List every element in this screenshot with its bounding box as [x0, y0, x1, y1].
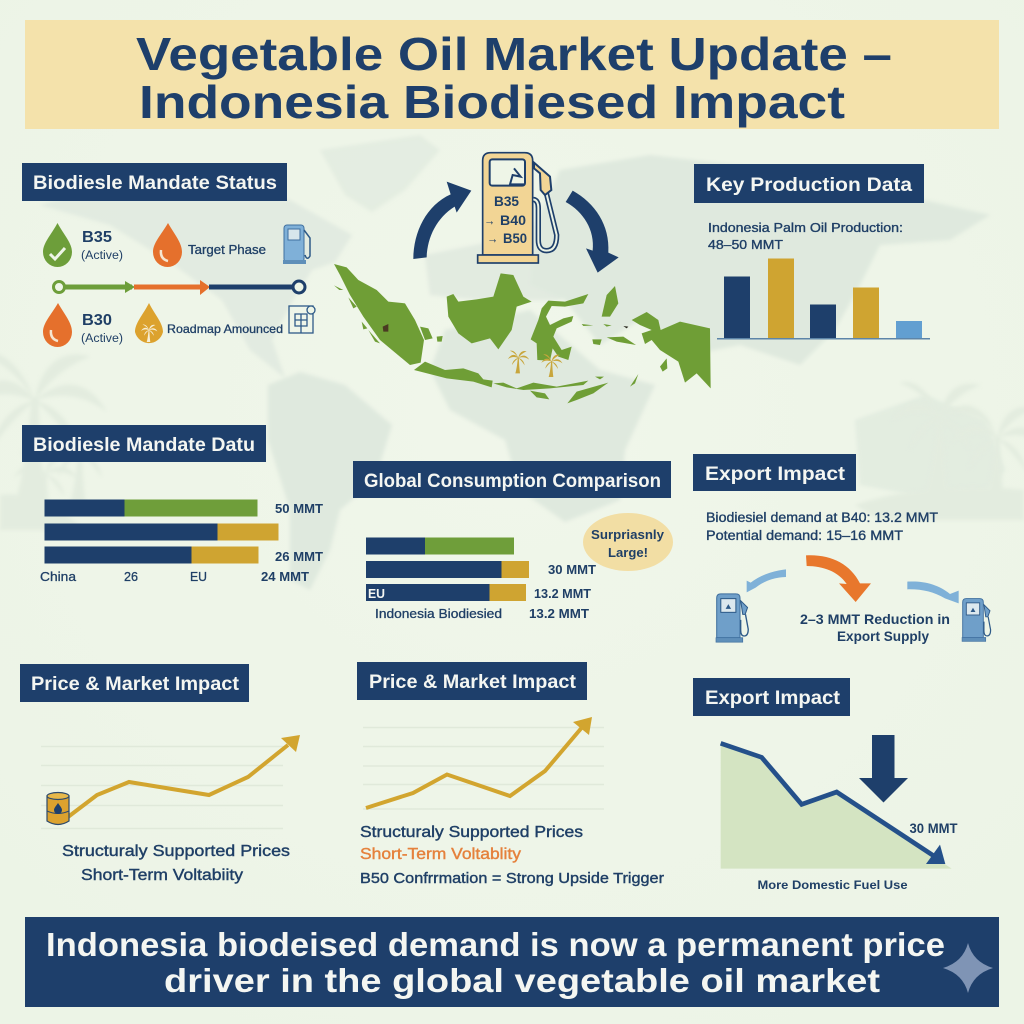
stacked bars [44, 500, 278, 564]
label: mandate stages on pump: B35 [494, 194, 519, 209]
text: price summary middle: B50 Confrrmation = Strong Upside Trigger [360, 870, 664, 887]
line chart: price middle [363, 717, 604, 809]
panel: price and market impact middle [357, 662, 664, 887]
icon: sparkle star [943, 943, 993, 993]
text: export supply reduction [800, 611, 950, 644]
heading: price and market impact [357, 662, 587, 700]
icon: oil barrel [47, 792, 69, 824]
panel: export impact top [693, 454, 991, 644]
arrow: curved right [566, 191, 619, 273]
label: B30 active: B30 [82, 312, 112, 329]
arrow: orange down [806, 555, 871, 602]
text: price summary middle: Short-Term Voltablity [360, 846, 521, 863]
arrow: blue left [747, 569, 786, 592]
heading: price and market impact [20, 664, 249, 702]
labels: bar values: China [40, 569, 77, 584]
heading: export impact: Export Impact [705, 463, 846, 485]
text: demand figures: Potential demand: 15–16 MMT [706, 528, 903, 543]
heading: export impact [693, 678, 850, 716]
arrow: down [859, 735, 908, 802]
panel: price and market impact left [20, 664, 300, 884]
heading: biodiesel mandate data: Biodiesle Mandate Datu [33, 434, 255, 456]
label: 30 MMT: 30 MMT [910, 821, 958, 836]
labels: bar values: 50 MMT [275, 501, 323, 516]
icon: orange drop bottom [43, 303, 72, 347]
text: price summary middle [360, 824, 664, 887]
background world map [40, 135, 1005, 590]
panel: export impact bottom [693, 678, 958, 892]
text: demand figures [706, 510, 938, 543]
label: mandate stages on pump: B40 [500, 212, 526, 228]
icon: green check drop [43, 223, 72, 267]
title banner: Indonesia Biodiesed Impact [139, 76, 845, 128]
bar chart: production [717, 258, 930, 340]
heading: export impact [693, 454, 856, 491]
panel: key production data [694, 164, 930, 340]
heading: biodiesel mandate status: Biodiesle Mandate Status [33, 172, 277, 194]
label: B35 active: (Active) [81, 250, 123, 262]
label: roadmap announced: Roadmap Amounced [167, 322, 283, 336]
callout: surprisingly large: Large! [608, 545, 648, 560]
text: demand figures: Biodiesiel demand at B40: 13.2 MMT [706, 510, 938, 525]
heading: price and market impact: Price & Market Impact [31, 673, 240, 695]
label: mandate stages on pump [484, 194, 527, 246]
heading: biodiesel mandate data [22, 425, 266, 462]
icon: large fuel pump [478, 153, 557, 263]
labels: bar values: 13.2 MMT [529, 606, 589, 621]
text: palm oil production: 48–50 MMT [708, 237, 783, 252]
label: mandate stages on pump: → [487, 231, 498, 246]
stacked bars: EU [368, 586, 385, 601]
labels: bar values [40, 501, 323, 584]
timeline [54, 280, 305, 295]
label: mandate stages on pump: → [484, 213, 495, 228]
labels: bar values: 24 MMT [261, 569, 309, 584]
label: target phase: Target Phase [188, 243, 266, 257]
heading: price and market impact: Price & Market Impact [369, 671, 576, 693]
label: B30 active [81, 312, 123, 345]
map of Indonesia [334, 264, 711, 403]
text: export supply reduction: 2–3 MMT Reduction in [800, 611, 950, 627]
heading: key production data: Key Production Data [706, 174, 912, 196]
icon: orange drop top [153, 223, 182, 267]
labels: bar values: 30 MMT [548, 562, 596, 577]
title banner [25, 20, 999, 129]
icon: fuel pump left [716, 594, 748, 642]
text: price summary middle: Structuraly Supported Prices [360, 824, 583, 841]
background palm silhouettes [0, 352, 1024, 530]
heading: biodiesel mandate status [22, 163, 287, 201]
callout: surprisingly large: Surpriasnly [591, 527, 665, 542]
arrow: blue right [907, 582, 959, 603]
text: palm oil production: Indonesia Palm Oil Production: [708, 220, 903, 235]
label: B35 active [81, 229, 123, 262]
text: price summary left [62, 843, 290, 884]
labels: bar values: 13.2 MMT [534, 586, 591, 601]
label: B30 active: (Active) [81, 333, 123, 345]
text: price summary left: Structuraly Supported Prices [62, 843, 290, 860]
labels: bar values: 26 MMT [275, 549, 323, 564]
bottom banner: driver in the global vegetable oil market [164, 962, 880, 999]
icon: blue fuel pump [283, 225, 310, 264]
labels: bar values [375, 562, 596, 621]
label: mandate stages on pump: B50 [503, 230, 527, 246]
panel: biodiesel mandate data [22, 425, 323, 584]
bottom banner [25, 917, 999, 1007]
heading: export impact: Export Impact [705, 687, 841, 709]
labels: bar values: Indonesia Biodiesied [375, 606, 502, 621]
text: price summary left: Short-Term Voltabiity [81, 867, 243, 884]
label: more domestic fuel use: More Domestic Fuel Use [758, 878, 908, 892]
arrow: curved left [413, 182, 471, 259]
panel: biodiesel mandate status [22, 163, 315, 347]
area chart: exports decline [721, 743, 952, 869]
heading: global consumption comparison [353, 461, 671, 498]
panel: global consumption comparison [353, 461, 673, 621]
icon: fuel pump right [962, 599, 991, 641]
icon: yellow palm drop [135, 303, 163, 343]
title banner: Vegetable Oil Market Update – [136, 28, 892, 80]
heading: global consumption comparison: Global Consumption Comparison [364, 470, 661, 492]
line chart: price left [41, 735, 300, 828]
stacked bars [366, 538, 529, 601]
labels: bar values: EU [190, 569, 207, 584]
icon: roadmap board [289, 306, 315, 333]
central graphic: fuel pump and Indonesia map [334, 153, 711, 403]
bottom banner: Indonesia biodeised demand is now a permanent price [46, 926, 945, 963]
text: export supply reduction: Export Supply [837, 628, 929, 644]
text: palm oil production [708, 220, 903, 252]
labels: bar values: 26 [124, 569, 138, 584]
label: B35 active: B35 [82, 229, 112, 246]
callout: surprisingly large [583, 513, 673, 571]
heading: key production data [694, 164, 924, 203]
